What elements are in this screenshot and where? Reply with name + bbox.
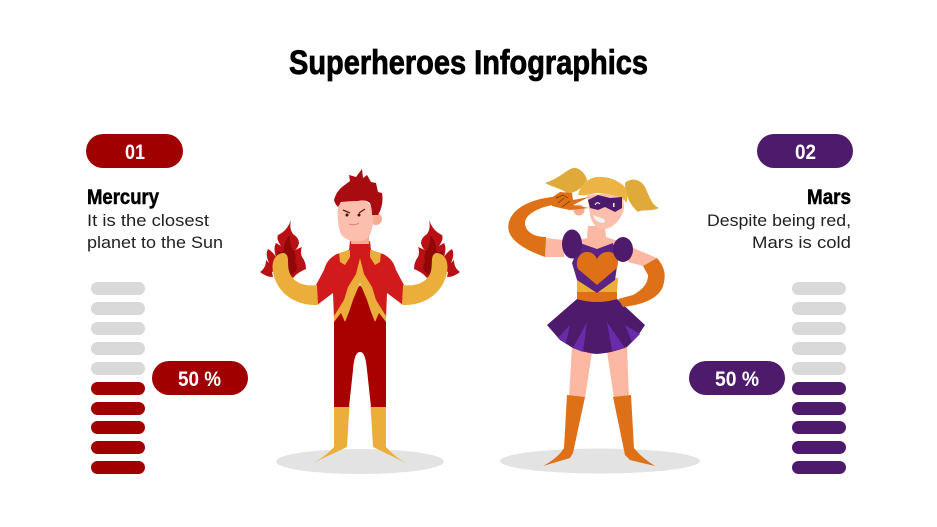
boots	[543, 395, 655, 466]
illustration: masked superheroine	[500, 168, 700, 473]
panel: Mars	[689, 134, 853, 474]
head	[545, 168, 659, 229]
suit	[315, 241, 405, 407]
panel: Mercury	[86, 134, 248, 474]
description: Mercury: It is the closest	[87, 212, 209, 230]
legs	[569, 345, 629, 398]
torso	[562, 226, 633, 302]
illustration: fire superhero	[260, 169, 460, 474]
description: Mars	[707, 212, 851, 252]
number pill 02: 02	[795, 141, 816, 164]
boots	[313, 406, 406, 463]
percent pill: Mars	[689, 361, 785, 395]
title: Superheroes Infographics	[289, 44, 648, 82]
gauge: Mars 50 percent	[792, 282, 846, 474]
head	[334, 169, 382, 244]
percent pill: Mars: 50 %	[715, 368, 759, 391]
flames	[260, 220, 460, 278]
gloves	[272, 253, 448, 305]
description: Mercury	[87, 212, 223, 252]
number pill 01: 01	[125, 141, 145, 164]
heading: Mars: Mars	[807, 186, 851, 209]
number pill 01	[86, 134, 183, 168]
saluting hand	[551, 192, 589, 210]
skirt	[547, 299, 645, 354]
arms	[508, 197, 665, 307]
percent pill: Mercury	[152, 361, 248, 395]
percent pill: Mercury: 50 %	[178, 368, 221, 391]
description: Mercury: planet to the Sun	[87, 234, 223, 252]
number pill 02	[757, 134, 853, 168]
gauge: Mercury 50 percent	[91, 282, 145, 474]
heading: Mercury: Mercury	[87, 186, 159, 209]
description: Mars: Despite being red,	[707, 212, 851, 230]
description: Mars: Mars is cold	[752, 234, 851, 252]
